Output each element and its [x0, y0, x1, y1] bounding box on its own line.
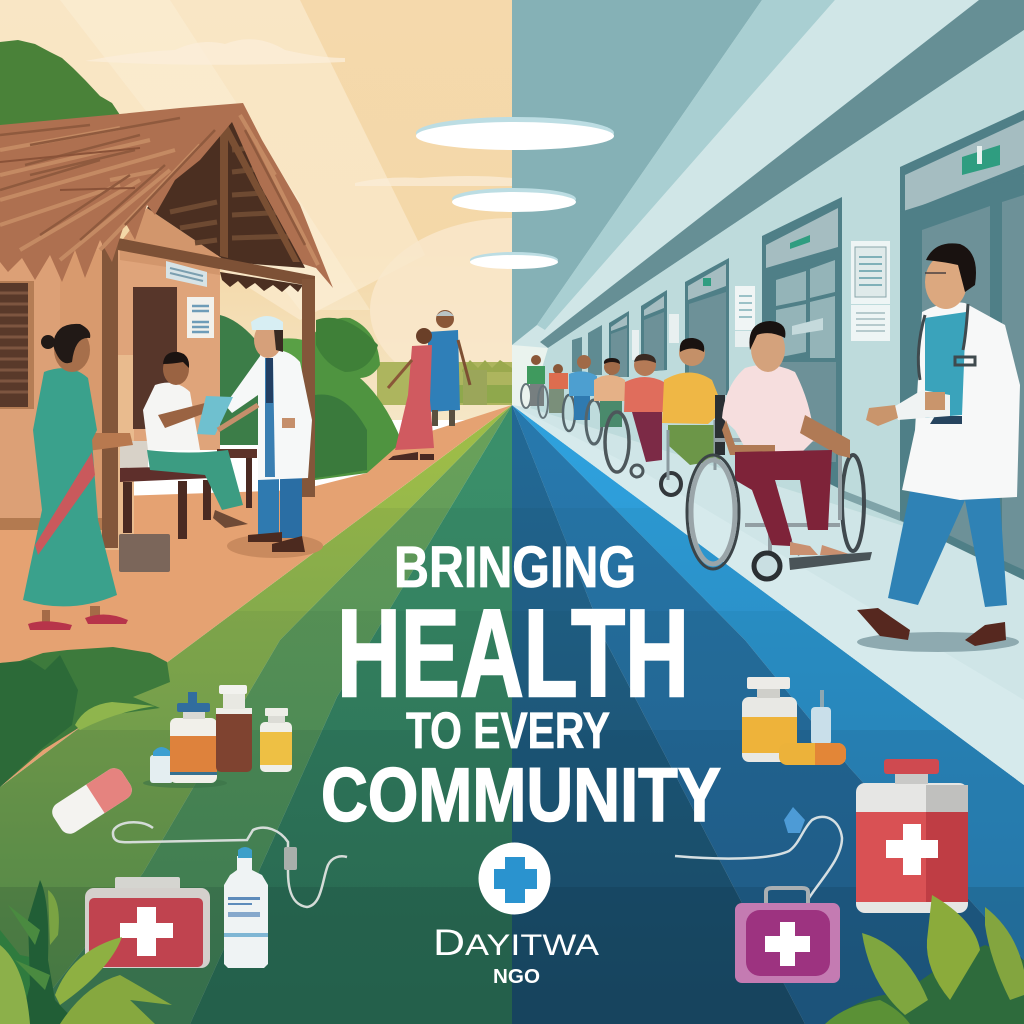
back wheel: [842, 455, 864, 551]
thatch roof: [0, 103, 333, 288]
person: woman in green sari: [23, 324, 133, 630]
person: patient in wheelchair: [687, 321, 872, 579]
panel: roadside bushes: [220, 315, 402, 480]
poster: [187, 297, 214, 338]
people: queue of patients in wheelchairs: [521, 338, 724, 495]
orange capsule: [779, 743, 846, 765]
icon: medicine bottles left: [143, 685, 292, 788]
shadow under doctor: [227, 534, 323, 558]
stone step: [120, 441, 148, 469]
heading line: to every: TO EVERY: [406, 702, 610, 759]
bench: [120, 466, 212, 539]
panel: hospital corridor background: [512, 0, 1024, 600]
lungi and feet: [147, 450, 243, 510]
door 1: [900, 110, 1024, 580]
big wheel: [687, 455, 739, 569]
foliage: bottom right leaves: [825, 895, 1024, 1024]
icon: blue bulb: [784, 807, 805, 833]
patient salmon: [605, 354, 664, 477]
arm: [158, 403, 208, 428]
coat: [902, 302, 1020, 500]
arms: [800, 415, 850, 458]
foliage: bottom left leaves: [0, 880, 172, 1024]
tree behind hut: [0, 40, 120, 126]
patient yellow: [661, 338, 724, 495]
sleeve: [892, 390, 950, 420]
title block: [321, 535, 721, 838]
person: doctor with clipboard: [197, 316, 312, 552]
caster: [754, 553, 780, 579]
trousers: [735, 450, 832, 546]
chair back: [715, 395, 725, 455]
shirt: [722, 365, 814, 453]
organisation name: DAYITWA: [433, 922, 599, 963]
icon: thatched hut: [0, 103, 333, 550]
patient blue: [563, 355, 597, 431]
glasses: [925, 272, 946, 274]
small blue vial: [150, 747, 173, 783]
footrest: [789, 552, 872, 570]
icon: first aid kit left: [85, 877, 210, 968]
icon: blue cross logo: [478, 842, 550, 914]
heading line: bringing: BRINGING: [394, 535, 636, 600]
panel: dirt path ground: [0, 405, 512, 787]
table: [217, 449, 257, 508]
organisation type: NGO: [493, 966, 540, 988]
door 2: [762, 197, 842, 490]
yellow bottle: [260, 708, 292, 772]
yellow jar: [742, 677, 797, 762]
head: [925, 255, 967, 309]
scrub top: [925, 312, 966, 418]
panel: far fields: [377, 360, 512, 405]
foliage: left bush: [0, 647, 170, 787]
person: walking doctor: [857, 243, 1020, 652]
hut walls: [0, 208, 220, 550]
panel: light corridor floor: [512, 405, 1024, 785]
heading line: health: HEALTH: [337, 585, 689, 723]
door 4: [641, 290, 667, 372]
brown bottle: [216, 685, 252, 772]
head: [751, 326, 785, 372]
feet: [790, 542, 852, 555]
box on ground: [119, 534, 170, 572]
icon: tubing right: [675, 817, 842, 898]
gable underside: [147, 118, 305, 268]
shirt: [143, 383, 200, 450]
chair frame: [715, 440, 840, 560]
wall notices: [632, 241, 890, 360]
door 3: [685, 258, 729, 395]
head: [163, 353, 189, 385]
shuttered window: [0, 281, 34, 409]
tall blue capped bottle: [170, 692, 217, 783]
icon: corridor doors: [572, 110, 1024, 580]
door 5: [609, 311, 629, 377]
patient green: [521, 355, 545, 408]
door 6: [588, 325, 602, 375]
person: villagers walking on path: [388, 310, 470, 460]
panel: road wedges: [0, 405, 1024, 1024]
trousers: [888, 416, 1007, 607]
support beam and posts: [102, 238, 315, 548]
doorway: [133, 287, 177, 429]
icon: capsule: [48, 764, 136, 838]
panel: rural sky background: [0, 0, 512, 420]
icon: drip chamber: [284, 847, 297, 870]
notice sign: [166, 261, 207, 287]
icon: IV tubing left: [113, 822, 347, 907]
person: seated patient with table: [120, 352, 257, 539]
patient peach: [586, 358, 625, 444]
icon: medicine bottles right: [742, 677, 846, 765]
ceiling lights: [416, 117, 614, 269]
stethoscope: [918, 304, 975, 380]
icon: purple medical bag: [735, 888, 840, 983]
door 7: [572, 337, 582, 372]
icon: large medicine bottle: [856, 759, 968, 913]
sandals: [857, 608, 1006, 646]
glass vial: [811, 690, 831, 745]
icon: saline bottle: [224, 847, 268, 968]
patient orange: [538, 364, 568, 418]
heading line: community: COMMUNITY: [321, 753, 721, 838]
